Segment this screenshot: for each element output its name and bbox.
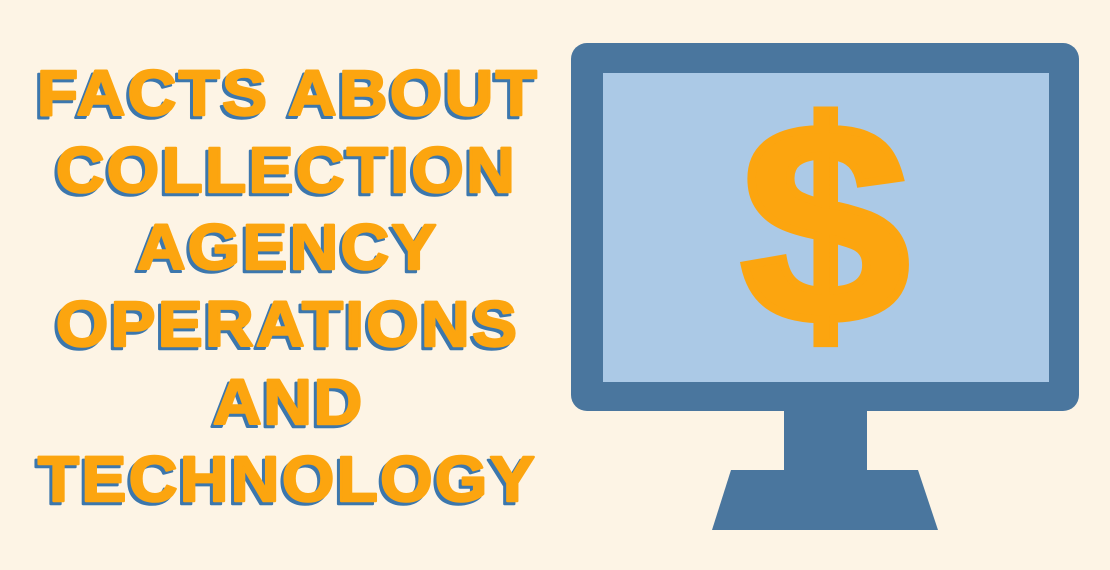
- monitor screen: [603, 73, 1049, 382]
- title shadow: TECHNOLOGY: [35, 446, 532, 518]
- title shadow: [34, 60, 534, 518]
- title shadow: AGENCY: [134, 214, 433, 286]
- title text: FACTS ABOUT: [37, 57, 537, 129]
- title text: COLLECTION: [56, 134, 515, 206]
- title shadow: OPERATIONS: [53, 291, 514, 363]
- title text: AGENCY: [137, 211, 436, 283]
- title text: OPERATIONS: [56, 288, 517, 360]
- monitor base: [712, 470, 938, 530]
- icon: computer monitor: [571, 43, 1079, 530]
- title text: AND: [213, 366, 362, 438]
- monitor bezel: [571, 43, 1079, 411]
- title text: TECHNOLOGY: [38, 443, 535, 515]
- title shadow: FACTS ABOUT: [34, 60, 534, 132]
- title: [34, 57, 537, 518]
- monitor neck: [784, 405, 867, 475]
- title shadow: COLLECTION: [53, 137, 512, 209]
- title shadow: AND: [210, 369, 359, 441]
- icon: dollar sign: $: [741, 65, 909, 383]
- title text: [37, 57, 537, 515]
